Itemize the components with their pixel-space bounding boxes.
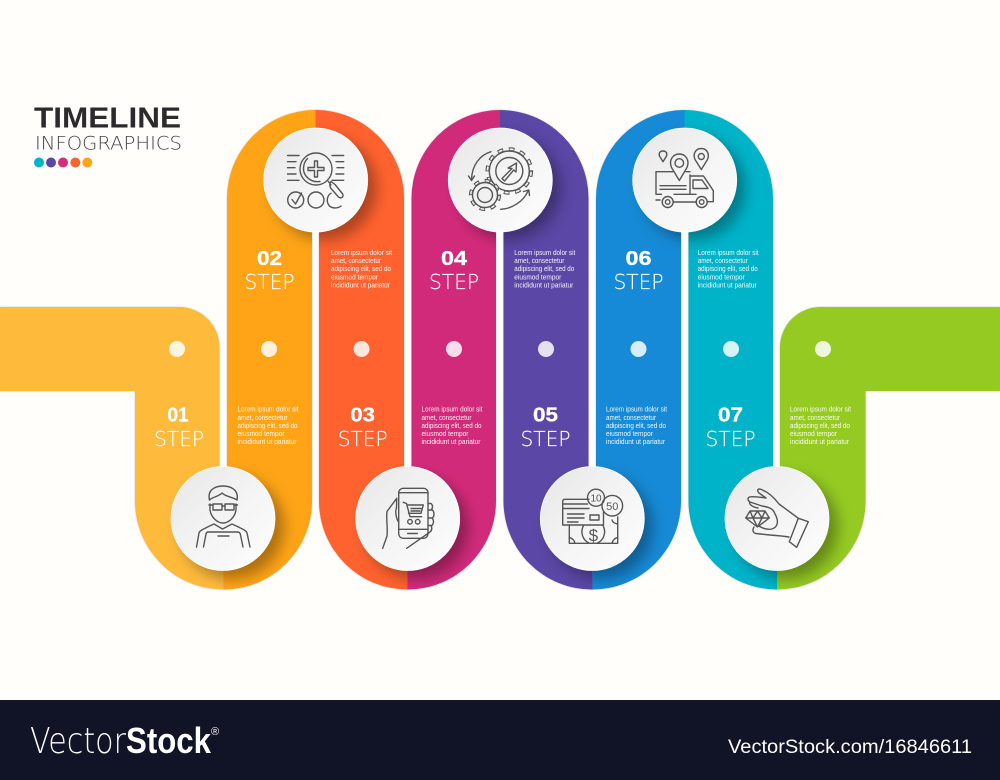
ribbon segment 7: teal bbox=[684, 110, 777, 590]
step 03 description: adipiscing elit, sed do bbox=[422, 421, 482, 430]
step 02 description: eiusmod tempor bbox=[331, 272, 379, 281]
step 07 description bbox=[790, 405, 851, 446]
step 04 description: amet, consectetur bbox=[514, 256, 565, 265]
step 04 bbox=[429, 128, 575, 294]
ribbon segment 6: blue bbox=[592, 110, 684, 590]
step 01 label: 01 bbox=[168, 405, 188, 427]
step 04 description: incididunt ut pariatur bbox=[514, 280, 574, 289]
step 05 description: eiusmod tempor bbox=[606, 429, 654, 438]
step 04 description: Lorem ipsum dolor sit bbox=[514, 248, 575, 257]
icon: hand holding phone with cart bbox=[383, 488, 434, 548]
step 07 description: Lorem ipsum dolor sit bbox=[790, 405, 851, 414]
step 02 description: amet, consectetur bbox=[331, 256, 381, 265]
step 06 circle bbox=[633, 128, 737, 232]
icon: card, coins and banknote: 10 bbox=[590, 494, 602, 504]
step 01 circle bbox=[171, 466, 275, 570]
step 04 label: 04 bbox=[441, 248, 468, 270]
step 04 circle bbox=[448, 128, 552, 232]
step 05 label: 05 bbox=[533, 405, 558, 427]
step 03 description: Lorem ipsum dolor sit bbox=[422, 405, 482, 414]
icon: person at laptop bbox=[196, 486, 250, 547]
heading: timeline: TIMELINE bbox=[34, 102, 181, 134]
step 02 label bbox=[244, 248, 294, 294]
icon: card, coins and banknote: 50 bbox=[606, 501, 618, 513]
footer logo wordmark: ® bbox=[211, 726, 219, 738]
step 01 description: eiusmod tempor bbox=[238, 429, 285, 438]
step 02 label: STEP bbox=[244, 270, 294, 294]
step 07 description: incididunt ut pariatur bbox=[790, 437, 850, 446]
colour dots bbox=[34, 158, 92, 168]
ribbon segment 1: yellow bbox=[0, 307, 224, 590]
step 06 description: eiusmod tempor bbox=[698, 272, 745, 281]
step 04 description: adipiscing elit, sed do bbox=[514, 264, 574, 273]
footer image id: VectorStock.com/16846611 bbox=[728, 737, 972, 758]
step 06 description bbox=[698, 248, 759, 289]
footer bar bbox=[0, 700, 1000, 780]
step 06 label: 06 bbox=[626, 248, 652, 270]
step 02 circle bbox=[264, 128, 368, 232]
step 02 description: incididunt ut pariatur bbox=[331, 280, 391, 289]
title block bbox=[34, 102, 182, 168]
step 06 bbox=[614, 128, 759, 294]
step 05 bbox=[520, 405, 667, 570]
step 01 description: incididunt ut pariatur bbox=[238, 437, 297, 446]
icon: delivery truck with map pins bbox=[656, 148, 713, 208]
step 07 description: eiusmod tempor bbox=[790, 429, 838, 438]
icon: magnifier and checklist bbox=[288, 153, 344, 208]
ribbon segment 8: green bbox=[777, 307, 1000, 590]
step 04 description bbox=[514, 248, 575, 289]
step 04 label: STEP bbox=[429, 270, 479, 294]
step 01 label bbox=[154, 405, 204, 451]
step 02 label: 02 bbox=[257, 248, 282, 270]
step 07 circle bbox=[725, 466, 829, 570]
step 03 bbox=[338, 405, 482, 570]
step 06 label bbox=[614, 248, 664, 294]
step 04 description: eiusmod tempor bbox=[514, 272, 562, 281]
step 02 description: adipiscing elit, sed do bbox=[331, 264, 391, 273]
step 06 description: adipiscing elit, sed do bbox=[698, 264, 758, 273]
ribbon segment 5: purple bbox=[500, 110, 592, 590]
step 05 description: adipiscing elit, sed do bbox=[606, 421, 666, 430]
step 03 description: amet, consectetur bbox=[422, 413, 472, 422]
ribbon segment 3: orange bbox=[316, 110, 408, 590]
step 05 description: incididunt ut pariatur bbox=[606, 437, 666, 446]
step 07 label: 07 bbox=[718, 405, 743, 427]
step 04 label bbox=[429, 248, 479, 294]
step 07 description: amet, consectetur bbox=[790, 413, 840, 422]
step 03 label bbox=[338, 405, 388, 451]
step 03 label: STEP bbox=[338, 427, 388, 451]
step 02 bbox=[244, 128, 392, 294]
step 05 description bbox=[606, 405, 667, 446]
step 01 description: Lorem ipsum dolor sit bbox=[238, 405, 298, 414]
step 06 description: Lorem ipsum dolor sit bbox=[698, 248, 759, 257]
step 01 description: amet, consectetur bbox=[238, 413, 288, 422]
icon: card, coins and banknote bbox=[563, 489, 623, 545]
step 06 description: incididunt ut pariatur bbox=[698, 280, 757, 289]
icon: gears with arrows bbox=[468, 149, 531, 209]
step 05 label: STEP bbox=[520, 427, 570, 451]
step 07 label bbox=[706, 405, 756, 451]
winding ribbon bbox=[0, 110, 1000, 590]
step 06 label: STEP bbox=[614, 270, 664, 294]
step 05 label bbox=[520, 405, 570, 451]
step 03 circle bbox=[356, 466, 460, 570]
step 05 description: Lorem ipsum dolor sit bbox=[606, 405, 667, 414]
step 01 bbox=[154, 405, 298, 570]
step 05 circle bbox=[540, 466, 644, 570]
icon: card, coins and banknote: $ bbox=[589, 526, 599, 545]
step 02 description bbox=[331, 248, 392, 289]
step 06 description: amet, consectetur bbox=[698, 256, 748, 265]
step 01 description: adipiscing elit, sed do bbox=[238, 421, 298, 430]
step 03 label: 03 bbox=[350, 405, 375, 427]
step 07 description: adipiscing elit, sed do bbox=[790, 421, 850, 430]
footer logo wordmark: VectorStock bbox=[30, 720, 224, 762]
circle shadows on ribbon bbox=[180, 136, 838, 579]
step 07 label: STEP bbox=[706, 427, 756, 451]
step 07 bbox=[706, 405, 851, 570]
icon: hand holding diamond bbox=[746, 489, 808, 547]
step 05 description: amet, consectetur bbox=[606, 413, 656, 422]
step 01 label: STEP bbox=[154, 427, 204, 451]
ribbon segment 4: magenta bbox=[408, 110, 500, 590]
subheading: infographics: INFOGRAPHICS bbox=[35, 132, 182, 154]
step 01 description bbox=[238, 405, 298, 446]
step 02 description: Lorem ipsum dolor sit bbox=[331, 248, 392, 257]
step 03 description: incididunt ut pariatur bbox=[422, 437, 481, 446]
ribbon segment 2: amber bbox=[224, 110, 316, 590]
step 03 description bbox=[422, 405, 482, 446]
timeline marker dots bbox=[169, 341, 831, 357]
step 03 description: eiusmod tempor bbox=[422, 429, 469, 438]
